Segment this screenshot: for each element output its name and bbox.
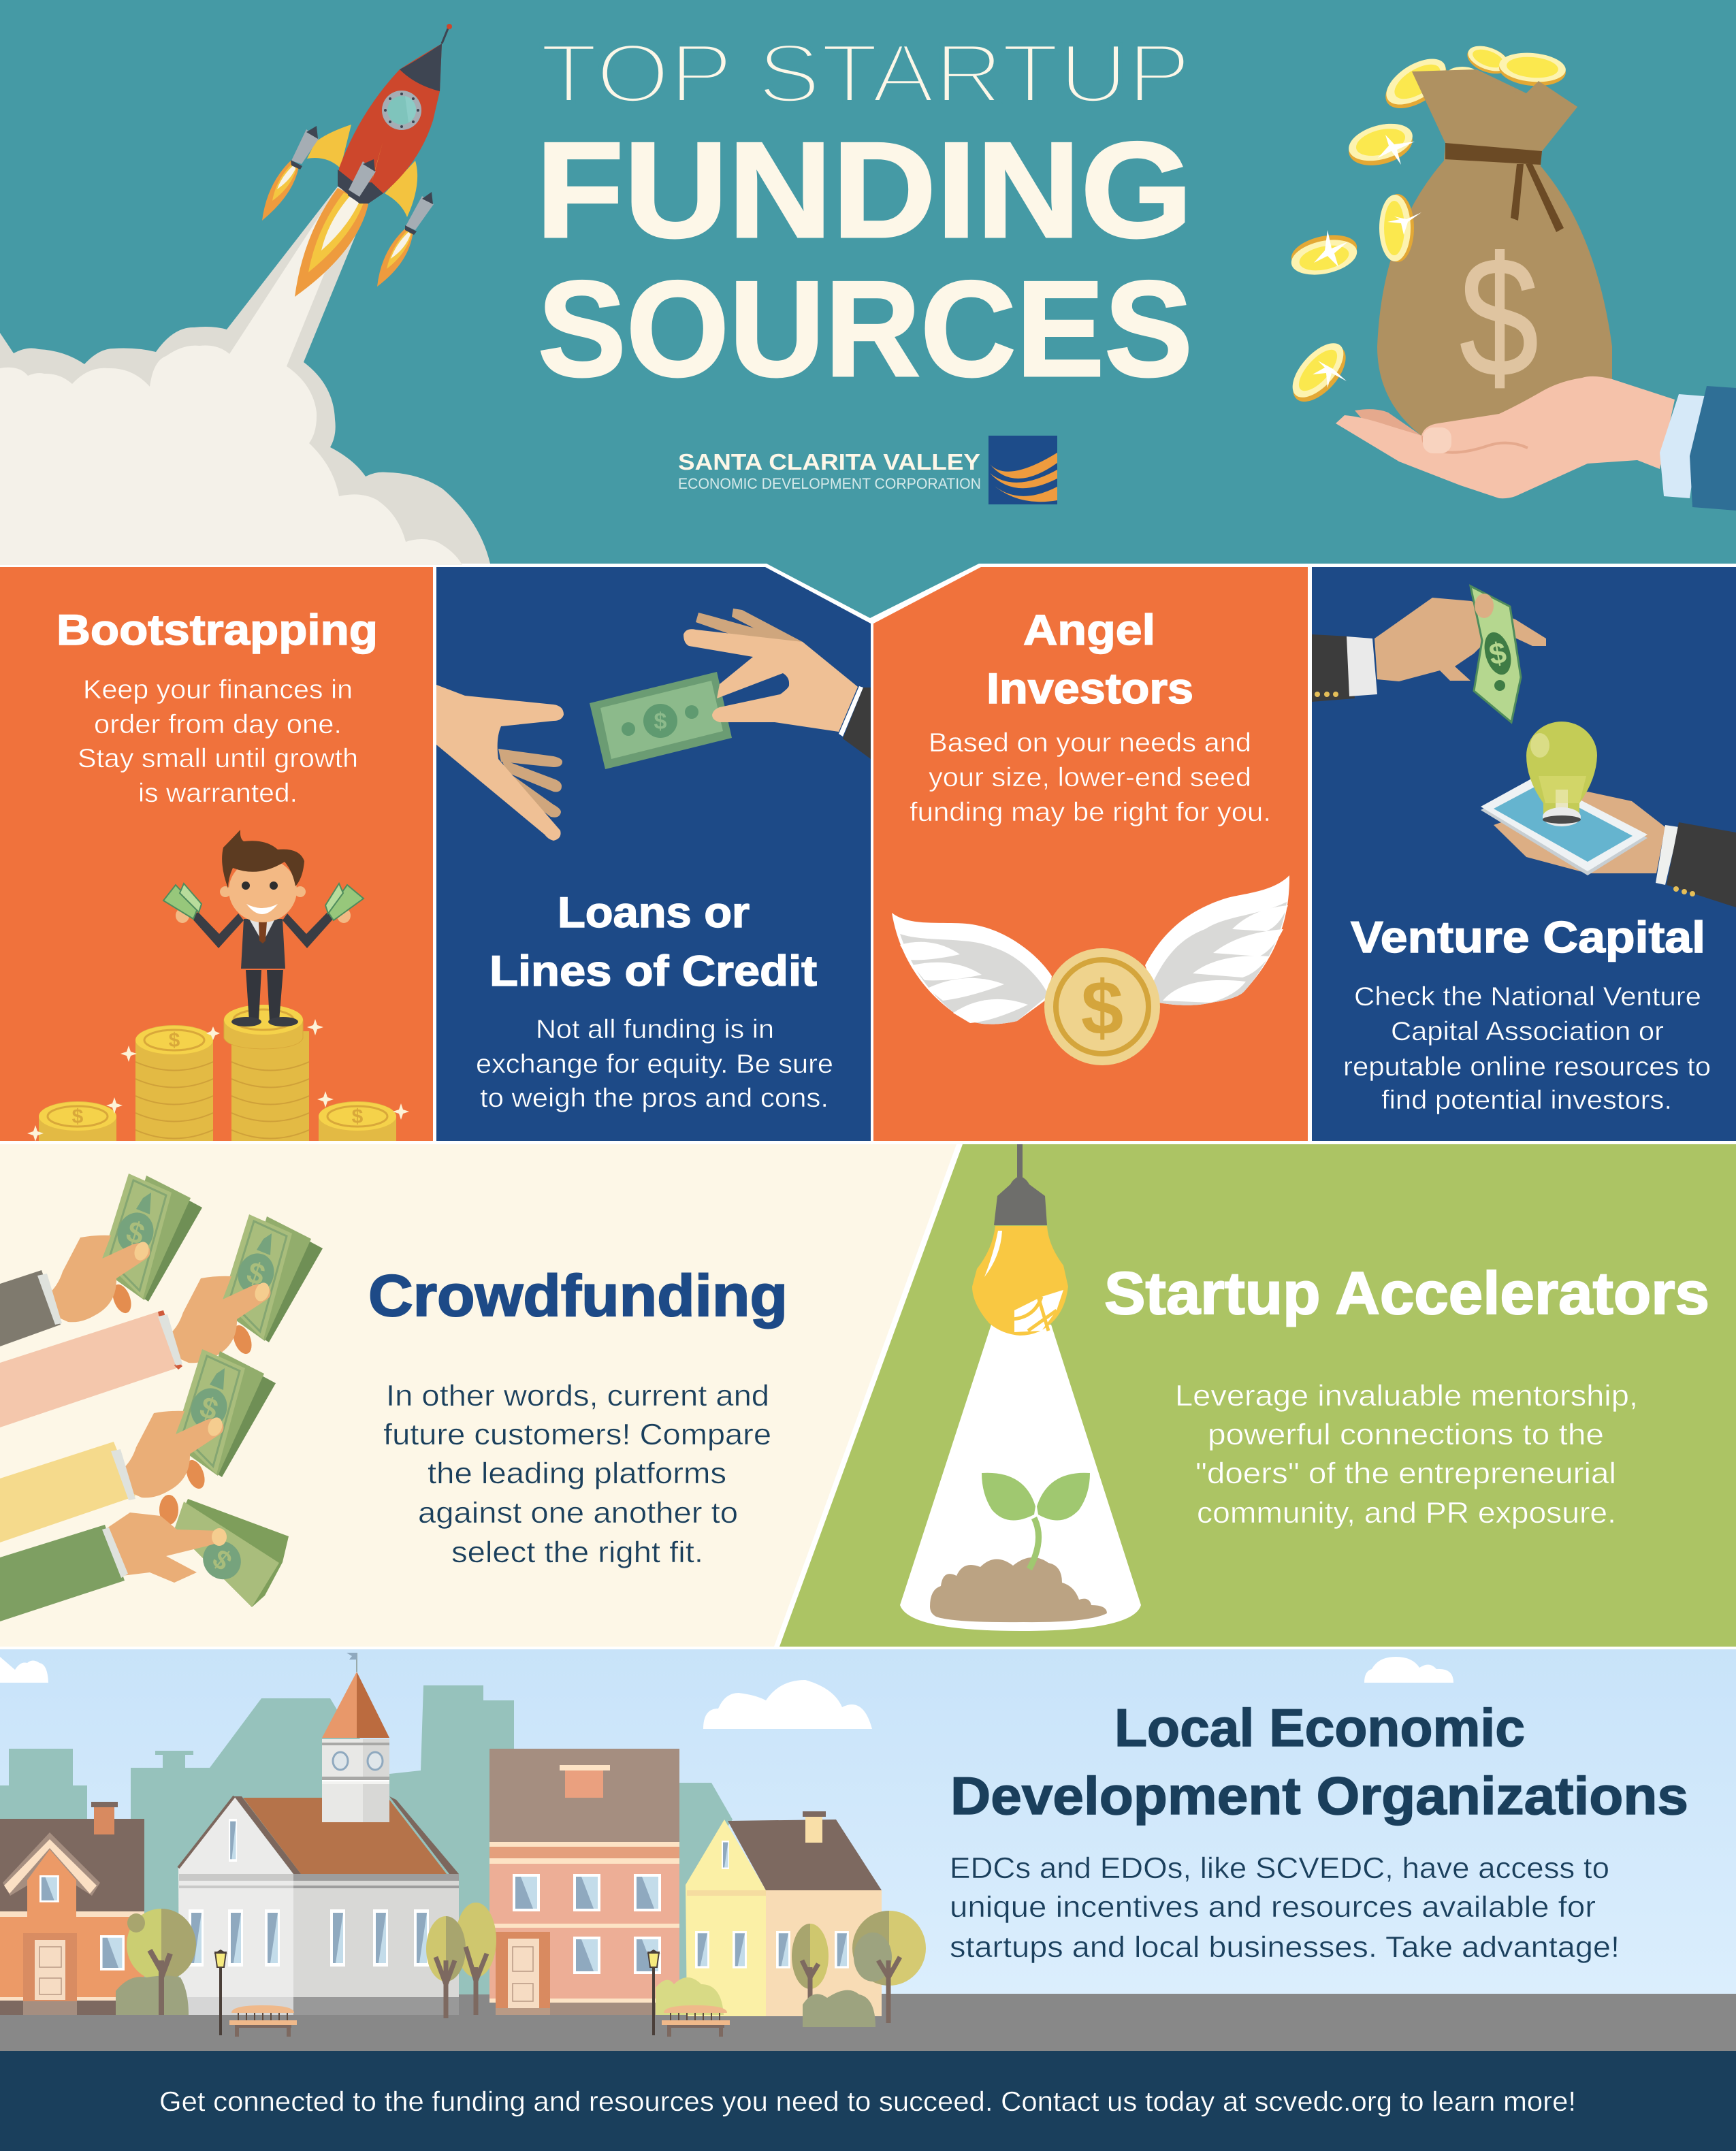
body text: powerful connections to the bbox=[1208, 1418, 1604, 1451]
body text: Based on your needs and bbox=[929, 728, 1251, 758]
body text: Not all funding is in bbox=[536, 1015, 774, 1044]
body text bbox=[78, 675, 358, 808]
skyline bbox=[0, 1685, 733, 1995]
body text: is warranted. bbox=[138, 779, 298, 808]
body text: Capital Association or bbox=[1391, 1017, 1664, 1046]
illustration: hand receiving bill bbox=[436, 685, 564, 841]
body text bbox=[910, 728, 1271, 827]
heading bbox=[950, 1698, 1688, 1826]
trees and bushes bbox=[116, 1903, 926, 2027]
coins behind bag bbox=[1377, 41, 1513, 118]
footer call to action: Get connected to the funding and resources you need to succeed. Contact us today at scvedc.org to learn more! bbox=[159, 2086, 1576, 2117]
body text: Keep your finances in bbox=[83, 675, 353, 705]
illustration: money bag and coins bbox=[1283, 41, 1736, 511]
hero background bbox=[0, 0, 1736, 618]
illustration: winged coin bbox=[892, 875, 1289, 1065]
hand holding the bag bbox=[1336, 376, 1736, 511]
hand 3: $ bbox=[196, 1390, 222, 1427]
body text: startups and local businesses. Take advantage! bbox=[950, 1930, 1620, 1964]
body text bbox=[476, 1015, 833, 1113]
logo subline: ECONOMIC DEVELOPMENT CORPORATION bbox=[678, 475, 981, 492]
illustration: hand giving bill bbox=[684, 609, 871, 759]
illustration: businessman with money bbox=[163, 830, 364, 1026]
illustration: rocket bbox=[262, 24, 452, 297]
bag bbox=[1377, 69, 1612, 436]
body text bbox=[1175, 1379, 1638, 1530]
illustration: investing hand with bill bbox=[1312, 586, 1546, 722]
body text bbox=[950, 1851, 1620, 1964]
heading: Bootstrapping bbox=[57, 607, 378, 654]
illustration: four hands with money bbox=[0, 1174, 323, 1621]
body text: the leading platforms bbox=[428, 1457, 726, 1490]
illustration: coin stacks: $ bbox=[169, 1029, 180, 1052]
building: town hall with clock tower bbox=[178, 1653, 459, 2015]
body text: order from day one. bbox=[94, 710, 342, 739]
header panel bbox=[0, 0, 1736, 618]
illustration: dollar bill bbox=[590, 672, 732, 769]
body text: future customers! Compare bbox=[383, 1418, 771, 1451]
panel: local economic development organizations bbox=[0, 1649, 1736, 2051]
street lamps bbox=[214, 1950, 660, 2035]
body text: Check the National Venture bbox=[1354, 982, 1701, 1012]
hand 2 bbox=[0, 1214, 323, 1427]
logo mark bbox=[988, 436, 1057, 504]
body text: EDCs and EDOs, like SCVEDC, have access to bbox=[950, 1851, 1609, 1885]
heading: Angel bbox=[1023, 607, 1155, 654]
coin: $ bbox=[1081, 965, 1123, 1050]
illustration: coin stacks: $ bbox=[352, 1105, 364, 1128]
building: pink townhouse bbox=[489, 1749, 679, 2015]
body text: "doers" of the entrepreneurial bbox=[1195, 1457, 1616, 1490]
body text bbox=[383, 1379, 771, 1569]
body text: reputable online resources to bbox=[1343, 1052, 1711, 1082]
panel: startup accelerators bbox=[779, 1144, 1736, 1647]
heading: Investors bbox=[986, 665, 1193, 713]
bag neck overlap bbox=[1412, 71, 1577, 151]
title bbox=[536, 27, 1193, 405]
logo wordmark: SANTA CLARITA VALLEY bbox=[678, 449, 980, 474]
building: yellow house bbox=[686, 1811, 882, 2016]
street bbox=[0, 1994, 1736, 2051]
building: left house bbox=[0, 1802, 144, 2015]
right wing bbox=[1145, 875, 1289, 1005]
hand 4 bbox=[0, 1495, 289, 1621]
panel: angel investors bbox=[873, 567, 1308, 1141]
illustration: coin stacks: $ bbox=[72, 1105, 84, 1128]
illustration: light beam bbox=[900, 1325, 1141, 1631]
panel: loans or lines of credit bbox=[436, 567, 871, 1141]
body text: unique incentives and resources available for bbox=[950, 1890, 1596, 1924]
body text: exchange for equity. Be sure bbox=[476, 1050, 833, 1079]
illustration: investing hand with bill: $ bbox=[1487, 636, 1509, 672]
body text: Leverage invaluable mentorship, bbox=[1175, 1379, 1638, 1412]
coin sparkles bbox=[1313, 135, 1421, 388]
body text: community, and PR exposure. bbox=[1197, 1496, 1616, 1530]
illustration: light bulb bbox=[972, 1144, 1068, 1336]
illustration: hand with phone and bulb bbox=[1481, 722, 1736, 907]
panel: crowdfunding bbox=[0, 1144, 957, 1647]
falling coins bbox=[1283, 117, 1417, 411]
hand 3 bbox=[0, 1349, 276, 1542]
bag dollar sign: $ bbox=[1460, 222, 1539, 412]
title line: top startup: TOP STARTUP bbox=[540, 27, 1191, 120]
body text: funding may be right for you. bbox=[910, 798, 1271, 827]
illustration: dollar bill: $ bbox=[654, 709, 667, 734]
panel: venture capital bbox=[1312, 567, 1736, 1141]
body text: find potential investors. bbox=[1381, 1086, 1672, 1115]
illustration: rocket launch cloud bbox=[0, 187, 490, 565]
heading: Lines of Credit bbox=[489, 948, 817, 995]
heading: Venture Capital bbox=[1351, 912, 1705, 962]
logo: Santa Clarita Valley EDC bbox=[678, 436, 1057, 504]
illustration: sprout in soil bbox=[930, 1473, 1107, 1622]
hand 4: $ bbox=[207, 1543, 238, 1576]
title line: sources: SOURCES bbox=[538, 253, 1193, 405]
body text: In other words, current and bbox=[386, 1379, 769, 1412]
heading bbox=[986, 607, 1193, 713]
heading: Crowdfunding bbox=[368, 1263, 788, 1329]
body text: Stay small until growth bbox=[78, 744, 358, 773]
clouds bbox=[0, 1657, 1453, 1729]
heading: Development Organizations bbox=[950, 1766, 1688, 1826]
heading: Local Economic bbox=[1114, 1698, 1525, 1758]
heading bbox=[489, 889, 817, 995]
title line: funding: FUNDING bbox=[536, 114, 1193, 266]
heading: Startup Accelerators bbox=[1104, 1259, 1709, 1327]
body text: to weigh the pros and cons. bbox=[480, 1084, 829, 1113]
hand 1 bbox=[0, 1174, 202, 1346]
body text: select the right fit. bbox=[451, 1536, 703, 1569]
body text bbox=[1343, 982, 1711, 1115]
body text: your size, lower-end seed bbox=[929, 763, 1251, 792]
panel: bootstrapping bbox=[0, 567, 433, 1142]
left wing bbox=[892, 913, 1052, 1024]
footer bbox=[0, 2051, 1736, 2151]
illustration: coin stacks bbox=[27, 1005, 409, 1142]
coin bbox=[1044, 948, 1160, 1065]
bag tie bbox=[1445, 143, 1564, 232]
coin front bbox=[1498, 50, 1567, 88]
hand 1: $ bbox=[123, 1214, 148, 1252]
hand 2: $ bbox=[243, 1255, 269, 1293]
benches bbox=[229, 2005, 730, 2037]
body text: against one another to bbox=[418, 1496, 738, 1530]
heading: Loans or bbox=[558, 889, 750, 937]
